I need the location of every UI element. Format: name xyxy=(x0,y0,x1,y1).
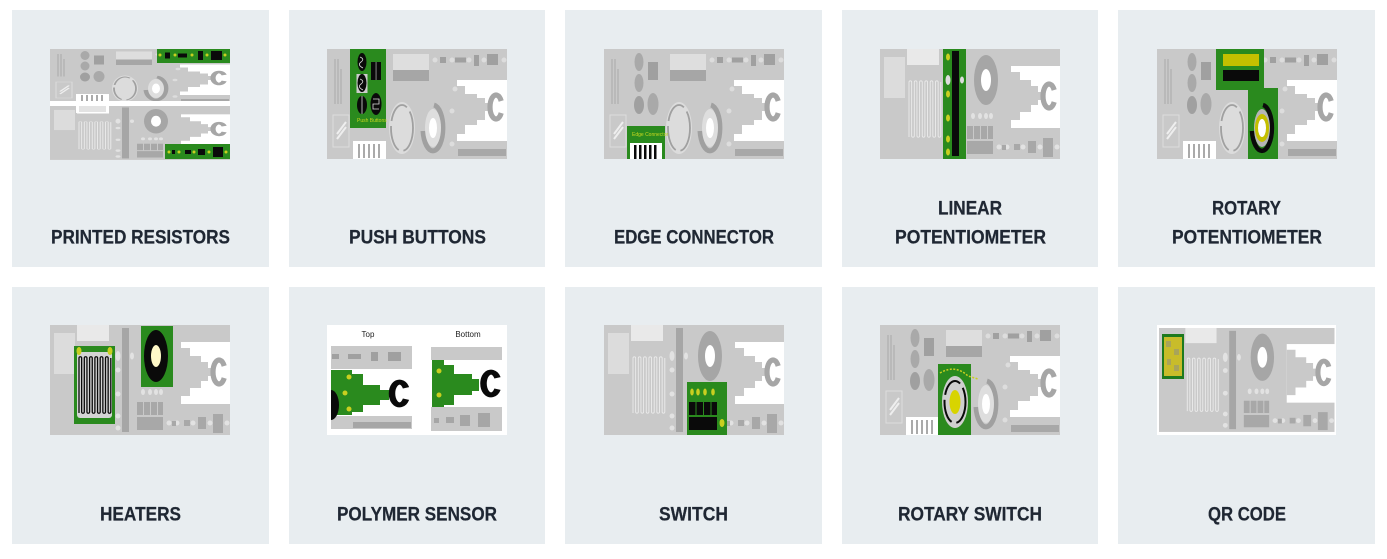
label: POLYMER SENSOR xyxy=(337,504,497,526)
label: ROTARY SWITCH xyxy=(898,504,1042,526)
heading: bottom: Bottom xyxy=(455,330,481,339)
label: POTENTIOMETER xyxy=(895,226,1046,248)
diagram: switch on board xyxy=(604,325,784,435)
card: linear potentiometer xyxy=(842,10,1098,267)
card: push buttons xyxy=(289,10,545,267)
card: printed resistors xyxy=(12,10,269,267)
diagram: edge connector on board xyxy=(604,49,784,159)
diagram: QR code on board xyxy=(1157,325,1336,435)
label: POTENTIOMETER xyxy=(1172,226,1322,248)
diagram: edge connector on board: Edge Connector xyxy=(632,132,668,138)
diagram: push buttons on board: Push Buttons xyxy=(357,118,387,124)
label: LINEAR xyxy=(938,198,1002,220)
label: EDGE CONNECTOR xyxy=(614,226,774,248)
card: rotary switch xyxy=(842,287,1098,544)
label: SWITCH xyxy=(659,504,728,526)
diagram: push buttons on board xyxy=(327,49,507,159)
card: QR code xyxy=(1118,287,1375,544)
diagram: rotary potentiometer on board xyxy=(1157,49,1337,159)
card: polymer sensor xyxy=(289,287,545,544)
heading: top: Top xyxy=(362,330,375,339)
diagram: printed resistors on board xyxy=(50,49,230,160)
diagram: linear potentiometer on board xyxy=(880,49,1060,159)
card: heaters xyxy=(12,287,269,544)
card: switch xyxy=(565,287,822,544)
card: edge connector xyxy=(565,10,822,267)
label: ROTARY xyxy=(1212,198,1281,220)
label: PRINTED RESISTORS xyxy=(51,226,230,248)
label: PUSH BUTTONS xyxy=(349,226,486,248)
diagram: heaters on board xyxy=(50,325,230,435)
diagram: polymer sensor top and bottom xyxy=(327,325,507,435)
label: HEATERS xyxy=(100,504,181,526)
label: QR CODE xyxy=(1208,504,1286,526)
card: rotary potentiometer xyxy=(1118,10,1375,267)
diagram: rotary switch on board xyxy=(880,325,1060,435)
